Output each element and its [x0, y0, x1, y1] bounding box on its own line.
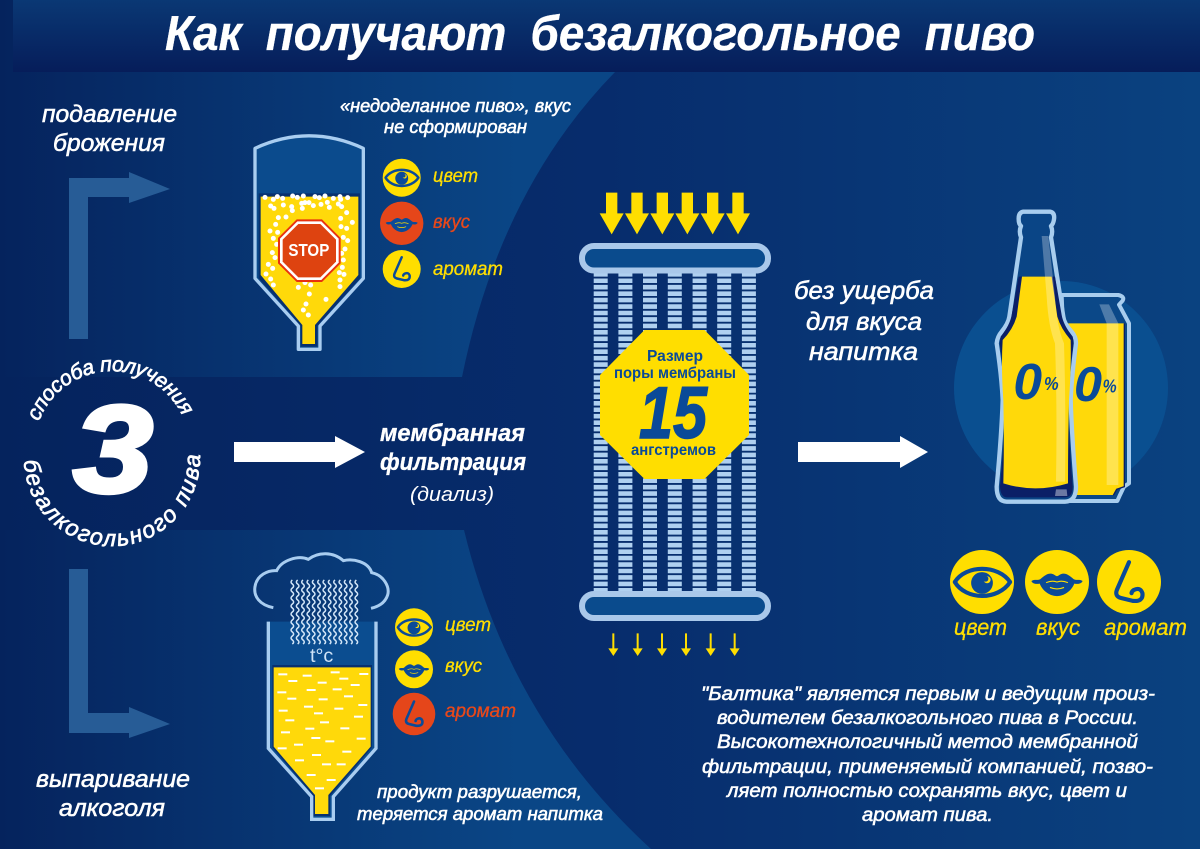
stop sign: STOP [288, 240, 329, 260]
heading: мембранная фильтрация: фильтрация [380, 449, 526, 476]
icons: final product [950, 550, 1187, 640]
icon: nose [383, 250, 421, 288]
curved text bottom: безалкогольного пива [24, 454, 201, 547]
icon: nose [1097, 550, 1161, 614]
paragraph: Балтика: аромат пива. [862, 805, 993, 826]
caption: недоделанное пиво: не сформирован [384, 117, 527, 137]
pore size octagon: поры мембраны [614, 365, 736, 382]
heading: подавление брожения: брожения [53, 130, 165, 157]
paragraph: Балтика: "Балтика" является первым и ведущим произ- [701, 684, 1155, 705]
heading: без ущерба для вкуса напитка: без ущерба [794, 277, 934, 305]
pore size octagon: ангстремов [631, 442, 716, 459]
label вкус: вкус [1036, 614, 1080, 640]
caption: недоделанное пиво: «недоделанное пиво», вкус [340, 96, 571, 116]
paragraph: Балтика: Высокотехнологичный метод мембранной [717, 732, 1138, 753]
caption: продукт разрушается: продукт разрушается, [377, 782, 582, 802]
badge: 3 способа получения безалкогольного пива [24, 360, 201, 547]
heading: без ущерба для вкуса напитка: для вкуса [806, 308, 922, 336]
heading: мембранная фильтрация: мембранная [380, 420, 525, 447]
title banner [13, 0, 1200, 72]
membrane tubes [601, 272, 749, 592]
icons: bottom method [393, 608, 516, 735]
arrow: to membrane [234, 436, 365, 468]
tank: fermentation with stop sign [255, 136, 363, 349]
can [1062, 295, 1129, 501]
heading: без ущерба для вкуса напитка [794, 277, 934, 366]
caption: недоделанное пиво [340, 96, 571, 137]
caption: продукт разрушается [357, 782, 603, 824]
input arrows [600, 193, 750, 234]
cloud [255, 554, 388, 608]
bottle [997, 212, 1076, 502]
heading: без ущерба для вкуса напитка: напитка [809, 338, 918, 366]
backdrop circle [954, 281, 1168, 495]
heading: выпаривание алкоголя: алкоголя [59, 795, 165, 822]
icon: nose [393, 693, 435, 735]
number 3: 3 [73, 381, 153, 519]
paragraph: Балтика: ляет полностью сохранять вкус, цвет и [726, 781, 1127, 802]
bubbles [262, 193, 355, 317]
curved text top: способа получения [30, 360, 193, 420]
icons: top method [380, 159, 503, 288]
heading: мембранная фильтрация: (диализ) [410, 484, 494, 506]
icon: lips [1025, 550, 1089, 614]
label вкус: вкус [445, 656, 482, 677]
output arrows [608, 633, 740, 656]
label аромат: аромат [433, 259, 503, 280]
label аромат: аромат [445, 701, 516, 722]
icon: lips [395, 650, 433, 688]
arrow: up and right [69, 172, 170, 339]
product: bottle and can [954, 212, 1168, 502]
pore size octagon [600, 330, 749, 479]
can: 0 [1074, 357, 1102, 412]
label аромат: аромат [1104, 614, 1187, 640]
arrow: to product [798, 436, 928, 468]
tank: evaporation [255, 554, 388, 819]
icon: lips [380, 202, 423, 245]
label цвет: цвет [954, 614, 1007, 640]
label цвет: цвет [433, 166, 478, 187]
icon: eye [395, 608, 433, 646]
icon: eye [950, 550, 1014, 614]
heading: выпаривание алкоголя: выпаривание [36, 766, 190, 793]
pore size octagon: 15 [639, 373, 708, 454]
can: % [1103, 375, 1117, 396]
caption: продукт разрушается: теряется аромат напитка [357, 804, 603, 824]
bottle: % [1044, 373, 1059, 394]
top header [582, 246, 768, 270]
membrane filter [582, 193, 768, 656]
steam waves [291, 580, 358, 644]
paragraph: Балтика: водителем безалкогольного пива в России. [717, 708, 1138, 729]
temperature label: t°c [310, 646, 334, 667]
title: Как получают безалкогольное пиво [165, 7, 1035, 61]
icon: eye [383, 159, 421, 197]
paragraph: Балтика [701, 684, 1155, 826]
label цвет: цвет [445, 615, 491, 636]
paragraph: Балтика: фильтрации, применяемый компанией, позво- [702, 757, 1153, 778]
bottom header [582, 594, 768, 618]
heading: подавление брожения [42, 101, 177, 157]
pore size octagon: Размер [647, 348, 703, 365]
stop sign [278, 219, 341, 282]
heading: подавление брожения: подавление [42, 101, 177, 128]
heading: мембранная фильтрация [380, 420, 526, 506]
heading: выпаривание алкоголя [36, 766, 190, 822]
alcohol dashes [277, 671, 368, 789]
bottle: 0 [1013, 353, 1042, 410]
arrow: down and right [69, 569, 170, 738]
label вкус: вкус [433, 212, 470, 233]
